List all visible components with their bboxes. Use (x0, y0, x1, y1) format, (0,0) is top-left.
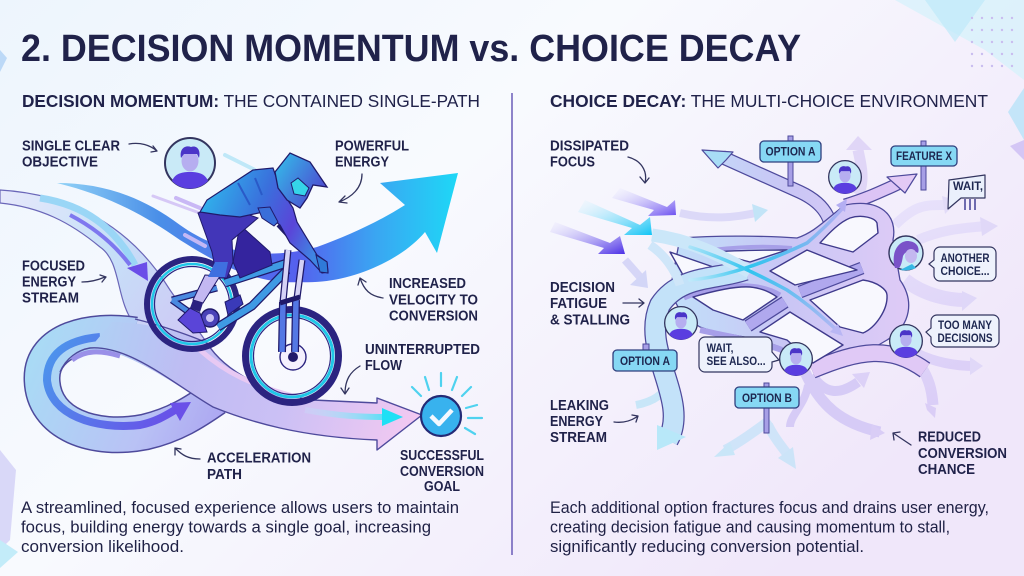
labels: decision momentum: CONVERSION (389, 308, 478, 324)
left blue curve (655, 270, 745, 450)
avatar: woman (889, 236, 923, 270)
bubble: wait see also: SEE ALSO... (706, 356, 766, 368)
description: choice decay: Each additional option fractures focus and drains user energy, (550, 498, 989, 517)
description: decision momentum: A streamlined, focused experience allows users to maintain (21, 498, 459, 517)
bubble: wait: WAIT, (953, 181, 983, 193)
icon: user objective (164, 137, 216, 189)
uninterrupted flow arrow (60, 319, 422, 450)
avatars: choice decay (665, 161, 923, 376)
panel: choice decay (550, 91, 1007, 556)
powerful energy arrow (57, 173, 458, 282)
top-right arrow (845, 174, 917, 205)
rider (178, 153, 328, 333)
sign: option a lower (613, 344, 677, 371)
bubble: wait (948, 175, 985, 210)
darker crossing bands (684, 247, 862, 350)
front wheel (246, 310, 338, 402)
bubble: another choice: ANOTHER (940, 253, 990, 265)
jacket (200, 168, 328, 273)
central ribbon mass (672, 203, 909, 370)
sign: option b (735, 383, 799, 433)
description: decision momentum (21, 498, 459, 556)
description: decision momentum: focus, building energy towards a single goal, increasing (21, 518, 431, 536)
left incoming strand (650, 235, 750, 285)
bubble: another choice (929, 247, 996, 281)
focused energy stream (0, 190, 207, 343)
labels: decision momentum: ENERGY (335, 155, 389, 171)
labels: choice decay: FOCUS (550, 155, 595, 171)
labels: choice decay: DECISION (550, 280, 615, 296)
bubble: too many decisions: TOO MANY (938, 320, 992, 332)
heading: decision momentum: DECISION MOMENTUM: THE CONTAINED SINGLE-PATH (22, 91, 480, 111)
labels: decision momentum (22, 139, 484, 495)
legs (233, 225, 272, 278)
labels: choice decay: STREAM (550, 430, 607, 446)
speech bubbles (699, 175, 999, 372)
fading outer arrows (636, 136, 998, 469)
labels: choice decay: REDUCED (918, 430, 981, 446)
labels: decision momentum: OBJECTIVE (22, 155, 98, 171)
glove (258, 207, 278, 226)
description: decision momentum: conversion likelihood. (21, 537, 184, 556)
labels: decision momentum: FOCUSED (22, 259, 85, 275)
tangled paths (650, 150, 925, 450)
acceleration path loop (42, 333, 215, 435)
bubble: wait see also: WAIT, (706, 343, 734, 355)
description: choice decay: significantly reducing conversion potential. (550, 537, 864, 556)
top-left arrow (702, 150, 831, 245)
fork (278, 225, 303, 352)
labels: decision momentum: ENERGY (22, 275, 76, 291)
bike and rider (147, 153, 338, 402)
annotation arrows: choice decay (614, 157, 911, 445)
bubble: too many decisions: DECISIONS (938, 333, 993, 345)
bubble: another choice: CHOICE... (940, 266, 990, 278)
labels: decision momentum: UNINTERRUPTED (365, 342, 480, 358)
labels: choice decay: FATIGUE (550, 296, 607, 312)
title: 2. DECISION MOMENTUM vs. CHOICE DECAY (21, 28, 801, 70)
labels: decision momentum: FLOW (365, 358, 402, 374)
labels: decision momentum: PATH (207, 467, 242, 483)
bottom right strand (812, 353, 925, 370)
frame (172, 225, 303, 352)
labels: choice decay: ENERGY (550, 414, 603, 430)
bubble: wait see also (699, 337, 779, 372)
helmet (275, 153, 327, 208)
labels: decision momentum: GOAL (424, 479, 460, 495)
incoming energy arrows (550, 188, 768, 288)
annotation arrows: decision momentum (82, 143, 383, 459)
sign: option a top: OPTION A (766, 146, 816, 158)
labels: decision momentum: STREAM (22, 291, 79, 307)
labels: choice decay: & STALLING (550, 312, 630, 328)
speed streaks (153, 155, 255, 246)
labels: choice decay: DISSIPATED (550, 139, 629, 155)
heading: choice decay: CHOICE DECAY: THE MULTI-CHOICE ENVIRONMENT (550, 91, 988, 111)
panel: decision momentum (0, 91, 484, 556)
sign: option b: OPTION B (742, 393, 792, 405)
labels: decision momentum: CONVERSION (400, 464, 484, 480)
holes between strands (670, 216, 887, 363)
labels: choice decay: LEAKING (550, 398, 609, 414)
cyan streams (690, 209, 842, 331)
labels: choice decay: CHANCE (918, 462, 975, 478)
bubble: too many decisions (926, 315, 999, 347)
labels: choice decay: CONVERSION (918, 446, 1007, 462)
divider (511, 93, 513, 555)
sign: feature x (891, 141, 957, 190)
labels: choice decay (550, 139, 1007, 478)
rear wheel (147, 259, 237, 349)
labels: decision momentum: ACCELERATION (207, 451, 311, 467)
sign: option a top (760, 136, 821, 186)
labels: decision momentum: VELOCITY TO (389, 292, 478, 308)
labels: decision momentum: SINGLE CLEAR (22, 139, 120, 155)
labels: decision momentum: INCREASED (389, 276, 466, 292)
sign: option a lower: OPTION A (620, 356, 670, 368)
labels: decision momentum: SUCCESSFUL (400, 448, 484, 464)
goal check icon (412, 373, 482, 436)
description: choice decay (550, 498, 989, 556)
signposts (613, 136, 957, 433)
labels: decision momentum: POWERFUL (335, 139, 409, 155)
sign: feature x: FEATURE X (896, 151, 952, 163)
description: choice decay: creating decision fatigue and causing momentum to stall, (550, 518, 950, 536)
